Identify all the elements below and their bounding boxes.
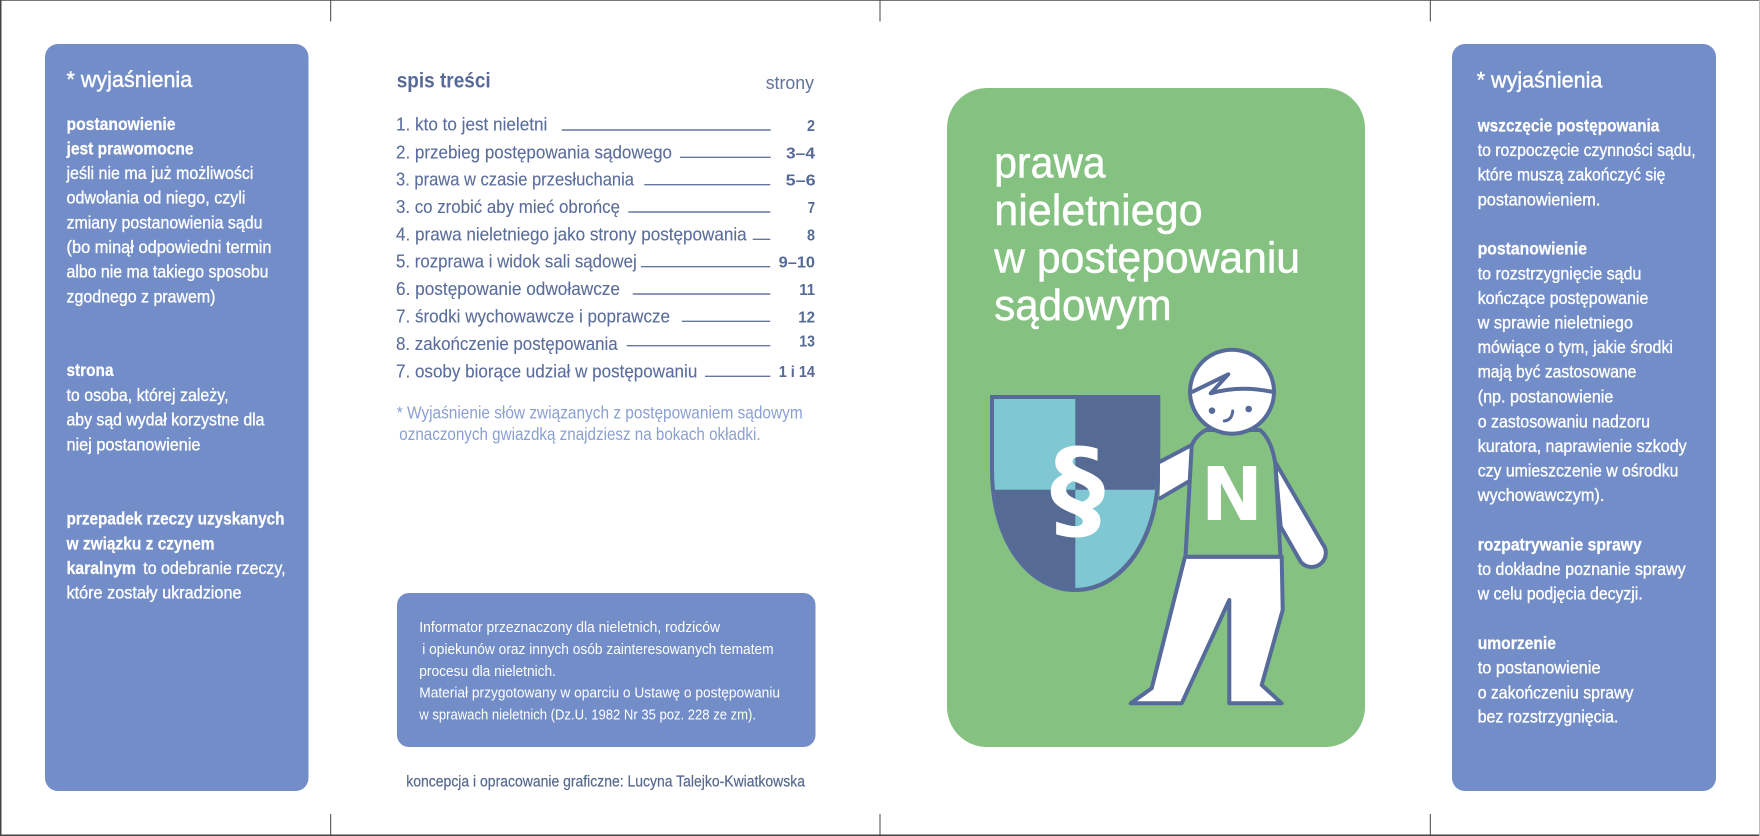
toc row 1: 2	[807, 118, 815, 135]
panel: information box: procesu dla nieletnich.	[419, 663, 556, 680]
toc row 7: 11	[799, 282, 815, 299]
head	[1190, 350, 1274, 434]
term: umorzenie: to postanowienie	[1478, 658, 1601, 678]
term: przepadek rzeczy	[66, 509, 286, 602]
term: przepadek rzeczy: karalnym	[66, 558, 136, 578]
term: postanowienie jest prawomocne	[66, 114, 272, 306]
term: postanowienie jest prawomocne: albo nie ma takiego sposobu	[66, 262, 268, 282]
term: postanowienie: wychowawczym).	[1477, 485, 1604, 505]
term: strona: to osoba, której zależy,	[66, 385, 228, 405]
toc row 3: 3. prawa w czasie przesłuchania	[396, 169, 635, 190]
heading: spis treści: spis treści	[397, 69, 491, 93]
term: postanowienie jest prawomocne: (bo minął odpowiedni termin	[66, 237, 272, 257]
toc row 8: 7. środki wychowawcze i poprawcze	[396, 305, 670, 326]
panel: information box: Materiał przygotowany w oparciu o Ustawę o postępowaniu	[419, 685, 780, 702]
legs	[1131, 557, 1283, 703]
toc row 9: 13	[799, 334, 815, 351]
toc row 10: 1 i 14	[779, 364, 815, 381]
toc row 2: 2. przebieg postępowania sądowego	[396, 141, 672, 162]
term: rozpatrywanie sprawy	[1477, 535, 1686, 604]
term: postanowienie jest prawomocne: jest prawomocne	[66, 138, 194, 158]
term: rozpatrywanie sprawy: rozpatrywanie sprawy	[1478, 535, 1642, 555]
heading: wyjaśnienia left: * wyjaśnienia	[66, 67, 193, 92]
panel: information box: i opiekunów oraz innych osób zainteresowanych tematem	[422, 641, 774, 658]
toc row 9: 8. zakończenie postępowania	[396, 333, 618, 354]
term: strona: aby sąd wydał korzystne dla	[66, 410, 265, 430]
term: postanowienie jest prawomocne: odwołania od niego, czyli	[66, 188, 246, 208]
term: postanowienie: (np. postanowienie	[1478, 386, 1613, 406]
term: umorzenie	[1478, 633, 1634, 727]
title: w postępowaniu	[993, 234, 1300, 283]
term: strona	[66, 360, 265, 455]
right arm	[1275, 462, 1326, 567]
title: nieletniego	[994, 186, 1203, 235]
term: postanowienie	[1477, 239, 1687, 505]
term: postanowienie: kończące postępowanie	[1478, 288, 1648, 308]
heading: wyjaśnienia right: * wyjaśnienia	[1477, 68, 1603, 93]
term: strona: niej postanowienie	[66, 435, 200, 455]
arm holding shield	[1160, 445, 1192, 498]
toc row 7: 6. postępowanie odwoławcze	[396, 278, 620, 299]
term: postanowienie: czy umieszczenie w ośrodku	[1478, 460, 1678, 480]
term: wszczęcie postępowania	[1477, 115, 1696, 209]
term: wszczęcie postępowania: postanowieniem.	[1478, 189, 1600, 209]
panel: information box: w sprawach nieletnich (Dz.U. 1982 Nr 35 poz. 228 ze zm).	[418, 707, 756, 724]
panel: information box	[397, 593, 816, 747]
term: przepadek rzeczy: które zostały ukradzione	[66, 582, 242, 602]
toc row 4: 7	[808, 200, 815, 217]
term: wszczęcie postępowania: to rozpoczęcie czynności sądu,	[1478, 140, 1696, 160]
term: postanowienie: w sprawie nieletniego	[1477, 312, 1633, 332]
toc row 4: 3. co zrobić aby mieć obrońcę	[396, 196, 620, 217]
term: postanowienie: mówiące o tym, jakie środki	[1478, 337, 1673, 357]
footnote	[397, 402, 803, 444]
footnote: * Wyjaśnienie słów związanych z postępowaniem sądowym	[397, 402, 803, 422]
icon: boy figure	[1131, 350, 1326, 703]
title	[993, 139, 1300, 330]
toc row 4	[396, 196, 815, 217]
panel: information box: Informator przeznaczony dla nieletnich, rodziców	[419, 619, 720, 636]
panel: right explanations	[1452, 44, 1716, 791]
term: wszczęcie postępowania: które muszą zakończyć się	[1478, 165, 1665, 185]
term: strona: strona	[66, 360, 114, 380]
icon: shield with paragraph sign	[992, 397, 1158, 590]
toc row 2: 3–4	[786, 145, 815, 162]
term: umorzenie: umorzenie	[1478, 633, 1556, 653]
toc row 3: 5–6	[786, 173, 816, 190]
term: rozpatrywanie sprawy: w celu podjęcia decyzji.	[1477, 584, 1643, 604]
term: przepadek rzeczy: przepadek rzeczy uzyskanych	[66, 509, 284, 529]
term: postanowienie jest prawomocne: jeśli nie ma już możliwości	[66, 163, 254, 183]
term: przepadek rzeczy: w związku z czynem	[66, 533, 214, 553]
toc row 1: 1. kto to jest nieletni	[396, 113, 547, 134]
credit line: koncepcja i opracowanie graficzne: Lucyna Talejko-Kwiatkowska	[406, 773, 805, 790]
title: sądowym	[994, 281, 1172, 330]
term: postanowienie: mają być zastosowane	[1478, 362, 1636, 382]
label: strony: strony	[766, 72, 815, 93]
term: postanowienie jest prawomocne: zmiany postanowienia sądu	[66, 212, 262, 232]
shirt letter N: N	[1201, 452, 1263, 538]
toc row 3	[396, 169, 816, 190]
term: wszczęcie postępowania: wszczęcie postępowania	[1477, 115, 1660, 135]
panel: green cover	[947, 88, 1365, 747]
icon: shield with paragraph sign: §	[1050, 425, 1105, 553]
term: postanowienie jest prawomocne: zgodnego z prawem)	[66, 286, 216, 306]
toc row 8: 12	[798, 309, 815, 326]
toc row 5: 4. prawa nieletniego jako strony postępowania	[396, 223, 747, 244]
term: postanowienie: to rozstrzygnięcie sądu	[1478, 263, 1641, 283]
panel: left explanations	[45, 44, 308, 791]
term: rozpatrywanie sprawy: to dokładne poznanie sprawy	[1478, 559, 1686, 579]
term: umorzenie: bez rozstrzygnięcia.	[1478, 707, 1618, 727]
title: prawa	[994, 139, 1106, 188]
toc row 1	[396, 113, 815, 135]
footnote: oznaczonych gwiazdką znajdziesz na bokach okładki.	[399, 424, 761, 444]
term: postanowienie: o zastosowaniu nadzoru	[1478, 411, 1650, 431]
shirt	[1186, 430, 1280, 557]
toc row 7	[396, 278, 815, 299]
toc row 6	[396, 251, 815, 272]
term: postanowienie jest prawomocne: postanowienie	[66, 114, 176, 134]
term: postanowienie: postanowienie	[1478, 239, 1587, 259]
toc row 5: 8	[807, 227, 815, 244]
term: umorzenie: o zakończeniu sprawy	[1478, 682, 1634, 702]
toc row 6: 5. rozprawa i widok sali sądowej	[396, 251, 637, 272]
toc row 6: 9–10	[779, 255, 815, 272]
term: przepadek rzeczy: to odebranie rzeczy,	[143, 558, 286, 578]
term: postanowienie: kuratora, naprawienie szkody	[1478, 436, 1687, 456]
toc row 9	[396, 333, 815, 354]
panel: table of contents	[396, 69, 816, 444]
toc row 10: 7. osoby biorące udział w postępowaniu	[396, 360, 697, 381]
